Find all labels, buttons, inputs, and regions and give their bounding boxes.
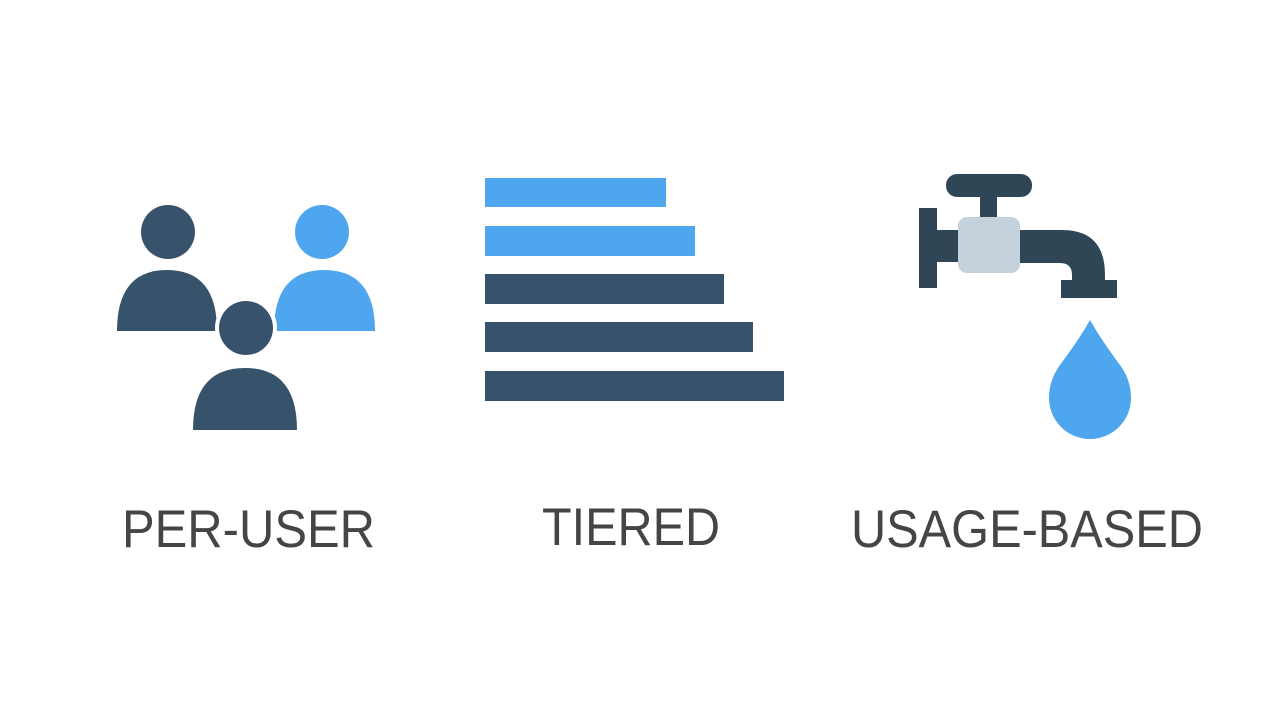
label: per-user: PER-USER <box>122 500 375 559</box>
icon: users group <box>117 205 375 430</box>
person right <box>274 205 375 331</box>
person center <box>193 301 297 430</box>
person left <box>117 205 217 331</box>
label: usage-based: USAGE-BASED <box>851 500 1203 559</box>
water drop <box>1049 320 1131 439</box>
icon: tiered bars <box>485 178 784 401</box>
icon: faucet with drop <box>919 174 1131 439</box>
label: tiered: TIERED <box>542 498 720 557</box>
